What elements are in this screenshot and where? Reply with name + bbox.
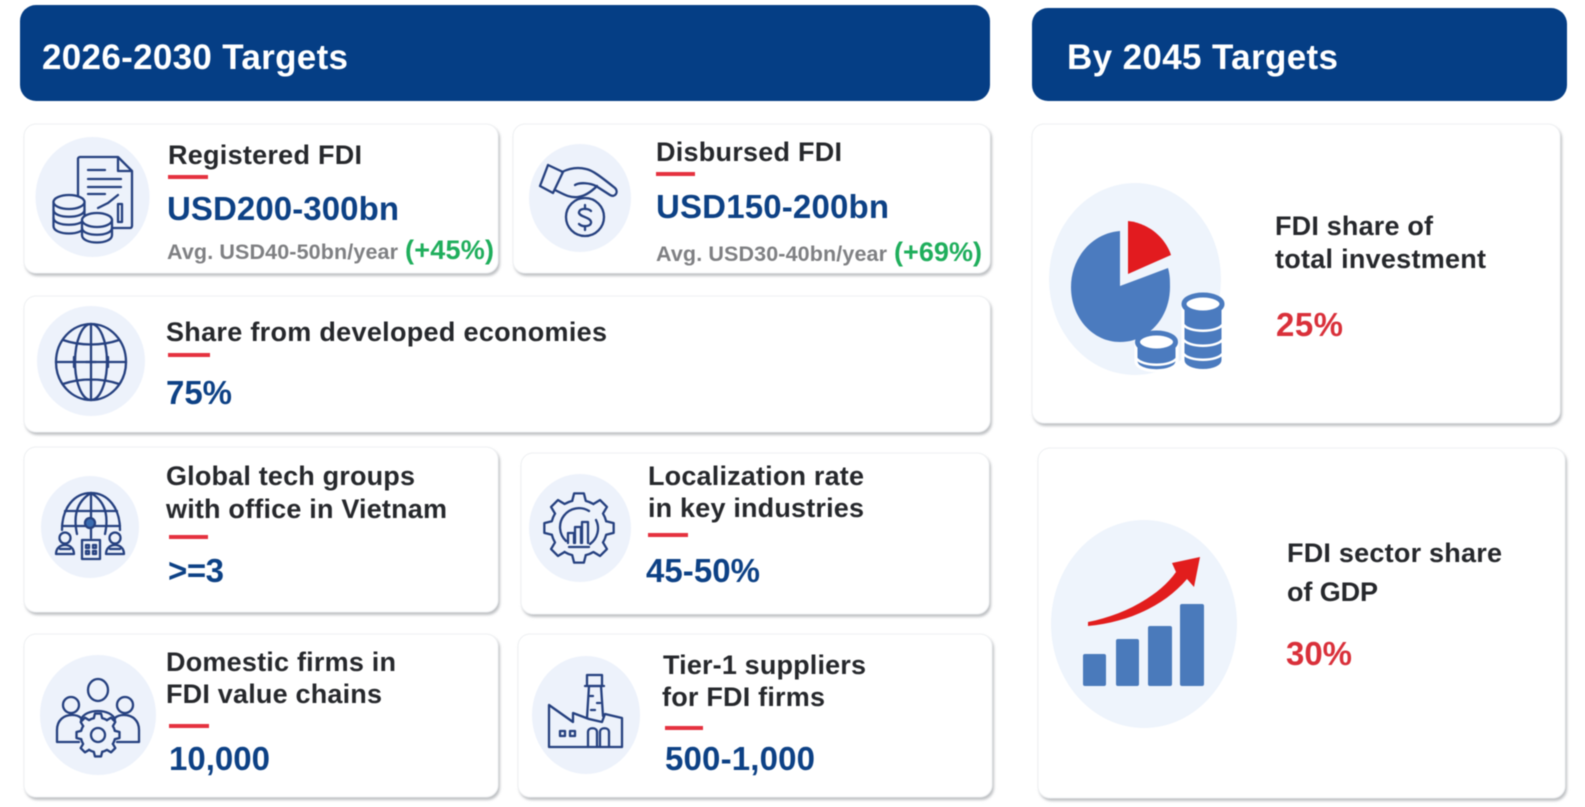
growth: (+45%)	[405, 235, 494, 265]
value: 10,000	[169, 740, 270, 777]
value: 30%	[1286, 635, 1352, 672]
title: Registered FDI	[168, 140, 362, 170]
accent line	[665, 726, 703, 730]
title	[648, 461, 864, 523]
accent line	[648, 533, 688, 537]
icon: hand and coin	[529, 144, 631, 252]
panel: tier-1 suppliers	[518, 634, 992, 797]
average note: Avg. USD40-50bn/year	[167, 240, 399, 264]
icon: bar chart with arrow	[1051, 520, 1237, 728]
accent line	[169, 535, 208, 539]
title: Localization rate	[648, 461, 864, 491]
title	[662, 650, 866, 712]
title	[166, 647, 396, 709]
accent line	[168, 175, 208, 179]
heading: 2026-2030 Targets: 2026-2030 Targets	[42, 38, 348, 77]
title: with office in Vietnam	[165, 494, 447, 524]
panel: FDI sector share of GDP	[1038, 448, 1565, 798]
average note: Avg. USD30-40bn/year	[656, 242, 888, 266]
value: USD200-300bn	[167, 190, 399, 227]
panel: FDI share of total investment	[1032, 124, 1560, 423]
icon: document and coins	[36, 137, 150, 257]
icon: pie chart and coins	[1049, 183, 1223, 375]
title: Disbursed FDI	[656, 137, 842, 167]
title: Tier-1 suppliers	[663, 650, 866, 680]
title: Share from developed economies	[166, 317, 607, 347]
title	[1287, 538, 1502, 607]
title: FDI share of	[1275, 211, 1434, 241]
title	[165, 461, 447, 524]
icon: globe, office and people	[41, 476, 139, 578]
title: for FDI firms	[662, 682, 825, 712]
title: FDI sector share	[1287, 538, 1502, 568]
title: Domestic firms in	[166, 647, 396, 677]
title: FDI value chains	[166, 679, 382, 709]
icon: factory	[532, 656, 640, 774]
title: of GDP	[1287, 577, 1378, 607]
panel: disbursed FDI	[513, 124, 990, 273]
title: total investment	[1275, 244, 1486, 274]
growth: (+69%)	[894, 237, 982, 267]
panel: localization rate	[521, 453, 989, 614]
heading: 2026-2030 Targets	[20, 5, 990, 101]
panel: registered FDI	[24, 124, 498, 273]
icon: gear with chart	[529, 474, 631, 582]
icon: globe	[37, 306, 145, 416]
value: USD150-200bn	[656, 188, 889, 225]
title: in key industries	[648, 493, 864, 523]
value: 75%	[166, 374, 232, 411]
heading: By 2045 Targets: By 2045 Targets	[1067, 38, 1338, 77]
value: 500-1,000	[665, 740, 815, 777]
panel: domestic firms	[24, 634, 498, 797]
value: 45-50%	[646, 552, 760, 589]
panel: global tech groups	[24, 447, 498, 612]
value: >=3	[168, 552, 224, 589]
accent line	[168, 353, 210, 357]
title	[1275, 211, 1486, 274]
accent line	[169, 724, 209, 728]
heading: By 2045 Targets	[1032, 8, 1567, 101]
accent line	[656, 172, 695, 176]
icon: people and gear	[40, 655, 156, 775]
title: Global tech groups	[166, 461, 415, 491]
value: 25%	[1276, 306, 1343, 343]
panel: share from developed economies	[24, 296, 990, 432]
